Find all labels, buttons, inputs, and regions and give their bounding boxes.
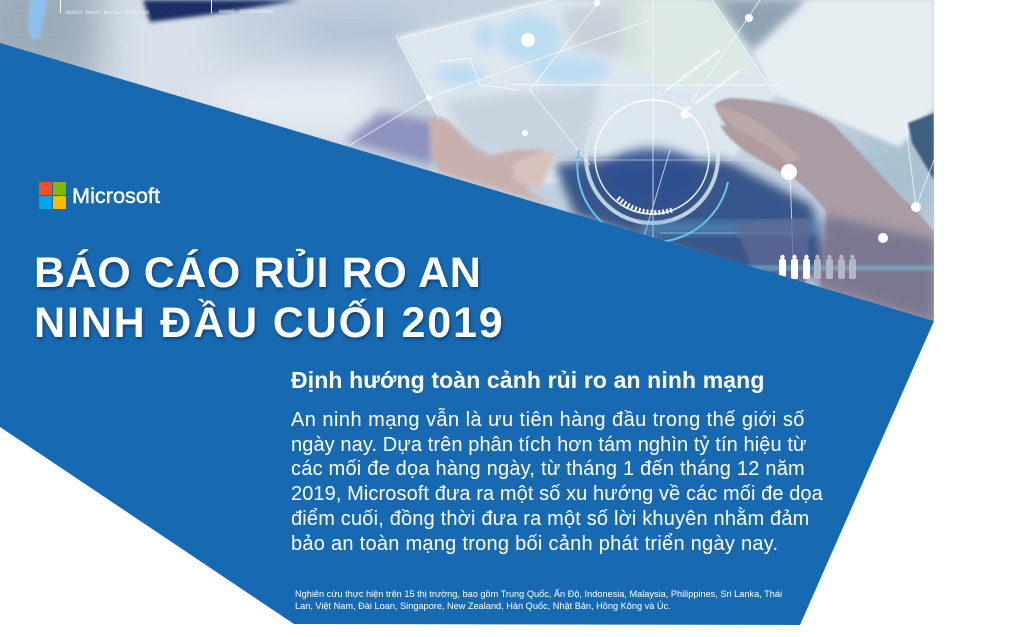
dark top strip xyxy=(143,0,300,22)
glowing network nodes xyxy=(426,0,921,243)
glow band xyxy=(640,222,820,234)
map fragment xyxy=(27,0,48,40)
world map blobs xyxy=(435,14,610,85)
title: BÁO CÁO RỦI RO AN xyxy=(34,249,481,297)
people icons xyxy=(779,255,856,279)
dark blue dashboard under hands xyxy=(555,160,830,285)
white document xyxy=(752,0,934,147)
palm and wrist xyxy=(714,98,934,322)
footnote: Nghiên cứu thực hiện trên 15 thị trường, bao gồm Trung Quốc, Ấn Độ, Indonesia, Malaysia, Philippines, Sri Lanka, Thái xyxy=(295,589,782,599)
holographic gauge rings xyxy=(577,91,728,242)
tablet lines xyxy=(350,0,934,280)
icon: four-colour squares xyxy=(39,182,66,209)
circular chart xyxy=(602,148,702,208)
blurred desk tones xyxy=(0,0,945,223)
right hand xyxy=(714,98,934,322)
body paragraph: 2019, Microsoft đưa ra một số xu hướng về các mối đe dọa xyxy=(291,483,823,505)
title: NINH ĐẦU CUỐI 2019 xyxy=(34,299,505,347)
footnote: Lan, Việt Nam, Đài Loan, Singapore, New Zealand, Hàn Quốc, Nhật Bản, Hồng Kông và Úc. xyxy=(295,601,671,611)
body paragraph: An ninh mạng vẫn là ưu tiên hàng đầu trong thế giới số xyxy=(291,409,805,431)
wordmark: Microsoft xyxy=(72,183,160,208)
Microsoft logo xyxy=(39,182,160,209)
footnote xyxy=(295,588,782,611)
background photo: hands on holographic tablet: 00999--00200200000 xyxy=(219,9,273,15)
body paragraph: ngày nay. Dựa trên phân tích hơn tám nghìn tỷ tín hiệu từ xyxy=(291,434,807,456)
phone xyxy=(908,113,934,180)
thumb xyxy=(733,217,812,283)
title xyxy=(34,248,505,347)
holographic tablet xyxy=(396,0,775,185)
body paragraph: bảo an toàn mạng trong bối cảnh phát triển ngày nay. xyxy=(291,533,778,555)
body paragraph: các mối đe dọa hàng ngày, từ tháng 1 đến tháng 12 năm xyxy=(291,458,805,480)
terminal text marks xyxy=(60,0,61,13)
left hand xyxy=(428,117,555,205)
body paragraph: điểm cuối, đồng thời đưa ra một số lời khuyên nhằm đảm xyxy=(291,508,809,530)
grey horizontal hologram lines xyxy=(512,84,800,233)
subheading: Định hướng toàn cảnh rủi ro an ninh mạng xyxy=(291,367,765,393)
background photo: hands on holographic tablet: 002021 basic motion accepted xyxy=(65,10,149,16)
body paragraph xyxy=(291,408,823,555)
